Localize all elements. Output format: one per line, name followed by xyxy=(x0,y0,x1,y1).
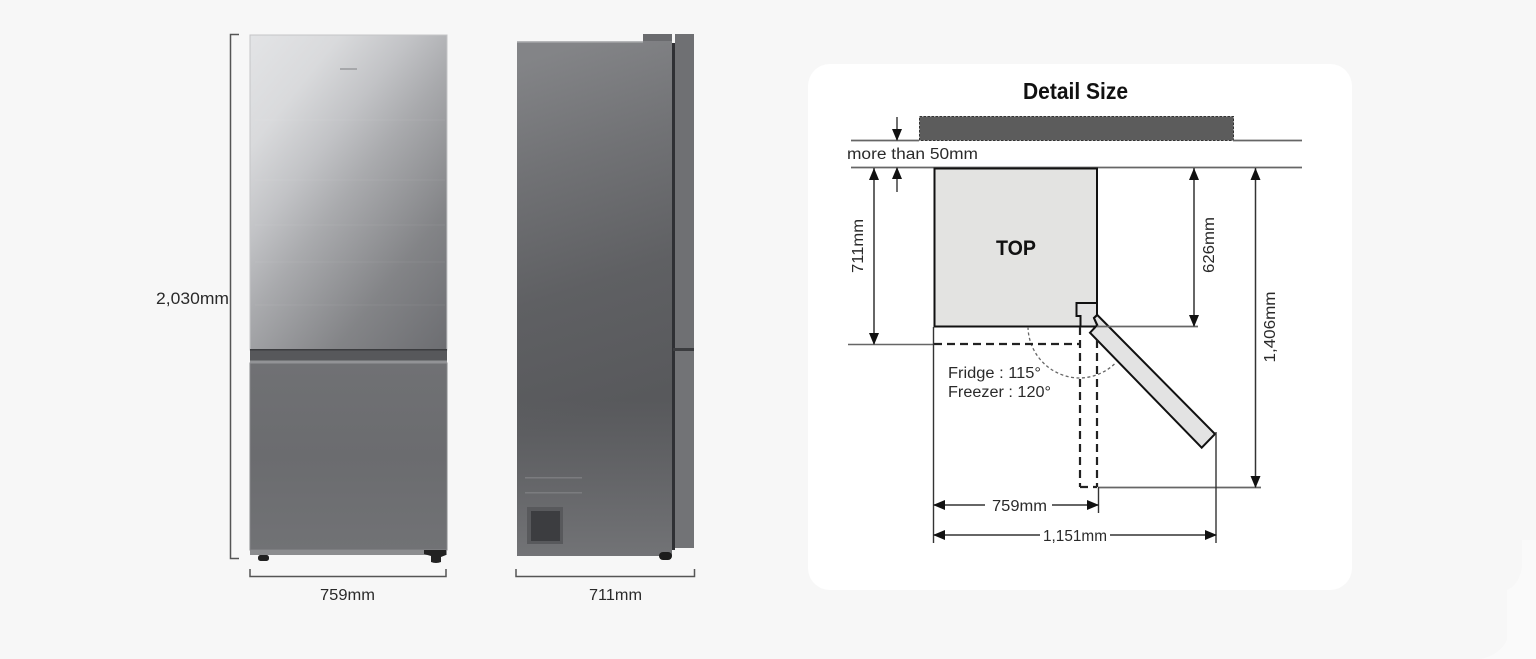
samsung logo mark xyxy=(340,68,357,70)
rear foot xyxy=(659,552,672,560)
top label: TOP xyxy=(996,237,1036,260)
height label: 2,030mm xyxy=(156,289,229,308)
height dimension bracket xyxy=(230,34,239,558)
lower door top lip xyxy=(250,360,447,364)
extension lines xyxy=(934,327,1216,543)
door gap xyxy=(673,348,694,351)
front width bracket xyxy=(250,569,446,576)
front view fridge xyxy=(250,35,447,563)
side lower door xyxy=(675,351,694,548)
vent lines xyxy=(525,477,582,494)
front width label: 759mm xyxy=(320,587,375,604)
panel background xyxy=(808,64,1352,590)
base strip xyxy=(250,550,447,555)
brushed texture xyxy=(255,120,445,505)
1406mm arrow xyxy=(1254,168,1256,487)
side upper door xyxy=(675,34,694,348)
711 baseline xyxy=(848,344,934,346)
626mm label: 626mm xyxy=(1201,217,1218,273)
vent grille xyxy=(531,511,560,541)
left foot xyxy=(258,555,269,561)
door seal xyxy=(672,43,675,550)
top view fridge body xyxy=(934,168,1097,326)
side view fridge xyxy=(517,34,694,560)
1406mm label: 1,406mm xyxy=(1262,292,1279,362)
closed door outline dashed xyxy=(934,327,1097,487)
angle labels: Freezer : 120° xyxy=(948,384,1051,401)
711mm arrow head top xyxy=(869,168,879,180)
626mm arrow head top xyxy=(1189,168,1199,180)
626 baseline xyxy=(1097,326,1198,328)
right foot xyxy=(424,550,446,563)
clearance arrow bottom xyxy=(896,168,898,192)
hinge cover xyxy=(643,34,672,43)
1406mm arrow head top xyxy=(1250,168,1260,180)
1406 baseline xyxy=(1098,486,1261,488)
body top highlight xyxy=(517,41,643,42)
bottom fade xyxy=(517,400,672,556)
clearance label: more than 50mm xyxy=(847,146,978,163)
1151mm dimension: 1,151mm xyxy=(1043,528,1107,545)
depth bracket xyxy=(516,569,694,576)
gap between doors xyxy=(250,350,447,361)
vent panel xyxy=(527,507,563,544)
depth label: 711mm xyxy=(589,587,642,604)
hinge area xyxy=(1076,303,1097,326)
panel: detail size xyxy=(808,64,1352,590)
clearance lines xyxy=(851,140,1302,168)
upper door shadow line xyxy=(250,349,447,350)
angle labels: Fridge : 115° xyxy=(948,365,1041,382)
angle labels xyxy=(948,365,1051,401)
fridge lower door xyxy=(250,363,447,550)
open door xyxy=(1090,315,1215,448)
side body xyxy=(517,41,672,556)
711mm arrow xyxy=(873,168,875,344)
wall above xyxy=(920,116,1234,140)
711mm label: 711mm xyxy=(850,219,867,273)
heading: Detail Size xyxy=(1023,78,1128,104)
626mm arrow xyxy=(1193,168,1195,326)
fridge upper door xyxy=(250,35,447,350)
clearance arrow top xyxy=(896,117,898,140)
door swing arc xyxy=(1028,327,1116,378)
lighter corner shape xyxy=(1480,540,1536,659)
759mm dimension: 759mm xyxy=(992,498,1047,515)
